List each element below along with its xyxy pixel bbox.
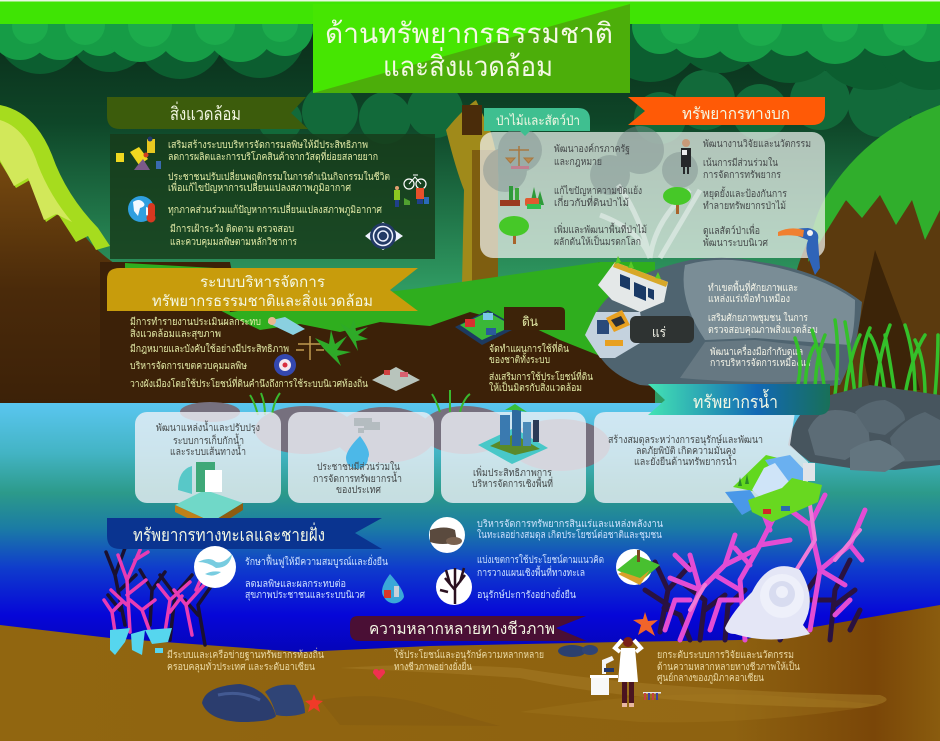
icon: red starfish <box>305 694 323 712</box>
background: sand <box>0 605 940 741</box>
icon: rocks <box>202 645 598 722</box>
text: research hub: ศูนย์กลางของภูมิภาคอาเซียน <box>657 672 764 684</box>
text: local resource network: ครอบคลุมทั่วประเทศ และระดับอาเซียน <box>167 659 315 673</box>
text: land conflict <box>554 185 642 209</box>
card: water sources: พัฒนาแหล่งน้ำและปรับปรุง <box>156 420 260 434</box>
text: coral conservation: อนุรักษ์ปะการังอย่างยั่งยืน <box>477 587 576 601</box>
text: participation: การจัดการทรัพยากร <box>703 170 782 181</box>
text: forest area: เพิ่มและพัฒนาพื้นที่ป่าไม้ <box>554 222 647 236</box>
icon: patient in bed <box>268 317 305 335</box>
icon: isometric land <box>455 310 518 345</box>
text: stop deforestation: หยุดยั้งและป้องกันการ <box>703 186 788 200</box>
icon: test tubes <box>643 692 661 700</box>
text: impact assessment <box>130 316 261 340</box>
text: sustainable use: ทางชีวภาพอย่างยั่งยืน <box>394 659 472 673</box>
text: friendly land use: ส่งเสริมการใช้ประโยชน์ที่ดิน <box>489 369 593 383</box>
text: friendly land use: ให้เป็นมิตรกับสิ่งแวดล้อม <box>489 380 582 394</box>
text: research: พัฒนางานวิจัยและนวัตกรรม <box>703 139 811 150</box>
text: monitoring: มีการเฝ้าระวัง ติดตาม ตรวจสอบ <box>170 223 294 235</box>
icon: seabed minerals <box>429 517 465 553</box>
heading: marine <box>107 518 382 549</box>
text: marine right: บริหารจัดการทรัพยากรสินแร่และแหล่งพลังงาน <box>477 519 663 530</box>
icon: scale <box>296 336 324 360</box>
icon: eye <box>365 222 403 250</box>
icon: world map <box>110 628 172 655</box>
text: research hub: ยกระดับระบบการวิจัยและนวัตกรรม <box>657 650 794 661</box>
text: pollution <box>168 139 378 163</box>
text: zoning <box>477 553 604 579</box>
icon: forest conflict <box>500 186 544 209</box>
title text: และสิ่งแวดล้อม <box>383 47 553 82</box>
text: stop deforestation: ทำลายทรัพยากรป่าไม้ <box>703 200 786 212</box>
text: sustainable use: ใช้ประโยชน์และอนุรักษ์ความหลากหลาย <box>394 648 544 661</box>
background: mineral rock <box>590 258 862 390</box>
text: local resource network <box>167 647 324 673</box>
icon: globe thermometer <box>128 196 156 222</box>
title text <box>325 18 613 82</box>
section: management text <box>130 316 420 391</box>
text: impact assessment: มีการทำรายงานประเมินผลกระทบ <box>130 316 261 328</box>
text: pollution zones: บริหารจัดการเขตควบคุมมลพิษ <box>130 361 247 372</box>
text: land conflict: แก้ไขปัญหาความขัดแย้ง <box>554 185 642 197</box>
heading: management <box>107 268 418 311</box>
text: monitoring <box>170 223 298 248</box>
heading: minerals: แร่ <box>652 324 666 340</box>
heading: environment <box>107 97 308 129</box>
text: reduce pollution: สุขภาพประชาชนและระบบนิเวศ <box>245 590 366 601</box>
heading: water resources: ทรัพยากรน้ำ <box>693 389 778 412</box>
text: wildlife: พัฒนาระบบนิเวศ <box>703 238 769 249</box>
icon: dam <box>725 455 822 522</box>
text: land conflict: เกี่ยวกับที่ดินป่าไม้ <box>554 195 629 209</box>
card: area management: บริหารจัดการเชิงพื้นที่ <box>472 476 553 490</box>
background: rocks right <box>788 385 940 472</box>
text: friendly land use <box>489 369 593 394</box>
text: research hub: ด้านความหลากหลายทางชีวภาพให้เป็น <box>657 659 800 673</box>
heading: land resources: ทรัพยากรทางบก <box>682 106 790 123</box>
text: mining regulation <box>710 344 812 369</box>
text: mining regulation: พัฒนาเครื่องมือกำกับดูแล <box>710 344 803 358</box>
title text: ด้านทรัพยากรธรรมชาติ <box>325 18 613 49</box>
text: forest area: ผลักดันให้เป็นมรดกโลก <box>554 234 641 248</box>
heading tab: forest and wildlife <box>484 108 590 136</box>
text: behaviour: เพื่อแก้ไขปัญหาการเปลี่ยนแปลงสภาพภูมิอากาศ <box>168 180 352 194</box>
coral: right <box>645 495 865 640</box>
background: canopy <box>0 0 940 90</box>
text: community capacity: เสริมศักยภาพชุมชน ในการ <box>708 312 809 324</box>
text: land use plan: ของชาติทั้งระบบ <box>489 352 550 366</box>
card: water sources <box>135 412 281 530</box>
background: underwater rocks and plants <box>180 390 610 471</box>
card: area management: เพิ่มประสิทธิภาพการ <box>473 465 553 479</box>
text: mining zones <box>708 280 798 305</box>
heading: biodiversity: ความหลากหลายทางชีวภาพ <box>369 620 555 638</box>
text: pollution: เสริมสร้างระบบบริหารจัดการมลพิษให้มีประสิทธิภาพ <box>168 139 368 151</box>
text: forest area <box>554 222 647 248</box>
text: behaviour: ประชาชนปรับเปลี่ยนพฤติกรรมในการดำเนินกิจกรรมในชีวิต <box>168 169 390 183</box>
background: grass right <box>795 320 938 395</box>
panel: land resources <box>480 126 825 258</box>
card: public participation <box>288 412 434 503</box>
text: marine left <box>194 546 404 603</box>
card: water balance: และยั่งยืนด้านทรัพยากรน้ำ <box>634 454 737 468</box>
card: water sources: และระบบเส้นทางน้ำ <box>170 444 246 458</box>
heading: land resources <box>628 97 825 125</box>
text: city planning: วางผังเมืองโดยใช้ประโยชน์ที่ดินคำนึงถึงการใช้ระบบนิเวศท้องถิ่น <box>130 376 368 390</box>
icon: island <box>616 549 660 585</box>
icon: waste recycling <box>116 136 161 170</box>
icon: palm plants <box>315 319 368 366</box>
text: land use plan <box>489 341 569 366</box>
panel: water cards <box>135 404 808 530</box>
icon: tree small <box>663 187 691 214</box>
background: forest <box>0 0 940 410</box>
text: marine right: ในทะเลอย่างสมดุล เกิดประโยชน์ต่อชาติและชุมชน <box>477 528 662 541</box>
text: public organisations: และกฎหมาย <box>554 157 602 168</box>
icon: dead coral <box>436 568 472 605</box>
text: wildlife: ดูแลสัตว์ป่าเพื่อ <box>703 223 760 237</box>
text: mining zones: ทำเขตพื้นที่ศักยภาพและ <box>708 280 798 294</box>
text: participation: เน้นการมีส่วนร่วมใน <box>703 157 778 169</box>
text: reduce pollution: ลดมลพิษและผลกระทบต่อ <box>245 579 346 590</box>
icon: flood building <box>175 462 243 530</box>
text: law: มีกฎหมายและบังคับใช้อย่างมีประสิทธิภาพ <box>130 343 289 355</box>
heading: water resources <box>648 384 830 415</box>
icon: wind circle <box>194 546 236 588</box>
heading: biodiversity <box>350 616 587 641</box>
text: community capacity: ตรวจสอบคุณภาพสิ่งแวดล้อม <box>708 322 818 336</box>
background: right hill <box>790 105 940 405</box>
icon: cyclist and gardener <box>394 175 429 207</box>
icon: tree <box>499 216 529 244</box>
text: participation <box>703 157 782 181</box>
text: climate: ทุกภาคส่วนร่วมแก้ปัญหาการเปลี่ยนแปลงสภาพภูมิอากาศ <box>168 202 383 216</box>
text: zoning: การวางแผนเชิงพื้นที่ทางทะเล <box>477 565 585 579</box>
heading: management: ทรัพยากรธรรมชาติและสิ่งแวดล้อม <box>152 290 373 310</box>
icon: toucan <box>778 228 820 275</box>
text: community capacity <box>708 312 818 336</box>
card: public participation: ประชาชนมีส่วนร่วมใน <box>317 461 400 473</box>
background: tree trunk <box>446 100 498 285</box>
text: zoning: แบ่งเขตการใช้ประโยชน์ตามแนวคิด <box>477 553 604 566</box>
text: local resource network: มีระบบและเครือข่ายฐานทรัพยากรท้องถิ่น <box>167 647 324 661</box>
text: public organisations: พัฒนาองค์กรภาครัฐ <box>554 143 630 155</box>
text: marine left: รักษาฟื้นฟูให้มีความสมบูรณ์และยั่งยืน <box>245 554 388 568</box>
text: mining zones: แหล่งแร่เพื่อทำเหมือง <box>708 291 790 305</box>
title banner <box>313 4 630 93</box>
icon: microscope <box>590 656 618 695</box>
heading tab: forest and wildlife: ป่าไม้และสัตว์ป่า <box>496 113 580 128</box>
card: water sources: ระบบการเก็บกักน้ำ <box>173 433 244 447</box>
heading: soil: ดิน <box>522 314 538 329</box>
icon: tap and drop <box>346 418 380 469</box>
text: behaviour <box>168 169 390 194</box>
heading: marine: ทรัพยากรทางทะเลและชายฝั่ง <box>133 522 325 545</box>
icon: pollution zone badge <box>274 354 296 376</box>
text: research hub <box>657 650 800 684</box>
icon: researcher <box>681 139 691 174</box>
background: left hill <box>0 105 130 405</box>
text: marine right <box>429 517 663 605</box>
text: sustainable use <box>394 648 544 673</box>
icon: orange starfish <box>633 612 658 636</box>
icon: polluted drop <box>382 574 404 603</box>
card: water balance: ลดภัยพิบัติ เกิดความมั่นคง <box>636 443 736 457</box>
text: wildlife <box>703 223 769 249</box>
icon: heart <box>373 669 385 680</box>
background: water <box>0 403 940 653</box>
section: soil <box>455 307 593 394</box>
icon: shell <box>725 566 810 640</box>
heading: management: ระบบบริหารจัดการ <box>200 274 325 291</box>
text: pollution: ลดการผลิตและการบริโภคสินค้าจากวัสดุที่ย่อยสลายยาก <box>168 149 378 163</box>
card: water balance: สร้างสมดุลระหว่างการอนุรักษ์และพัฒนา <box>608 434 763 446</box>
text: monitoring: และควบคุมมลพิษตามหลักวิชาการ <box>170 237 298 248</box>
panel: environment <box>110 134 435 259</box>
heading: environment: สิ่งแวดล้อม <box>170 101 241 124</box>
card: area management <box>441 404 586 503</box>
text: stop deforestation <box>703 186 788 212</box>
text: land use plan: จัดทำแผนการใช้ที่ดิน <box>489 341 569 355</box>
icon: smart city <box>478 404 548 464</box>
card: water balance <box>594 412 808 503</box>
icon: mine <box>585 256 668 358</box>
section: minerals <box>585 256 818 369</box>
text: reduce pollution <box>245 579 366 601</box>
background: grass and soil <box>100 262 655 407</box>
text: mining regulation: การบริหารจัดการเหมืองแร่ <box>710 357 812 369</box>
heading: minerals <box>630 316 694 343</box>
icon: scales <box>506 146 533 169</box>
text: public organisations <box>554 143 630 168</box>
text: impact assessment: สิ่งแวดล้อมและสุขภาพ <box>130 326 221 340</box>
icon: isometric city <box>372 367 420 391</box>
card: public participation: การจัดการทรัพยากรน้ำ <box>313 471 402 485</box>
coral: left <box>104 548 212 645</box>
card: public participation: ของประเทศ <box>336 485 382 496</box>
icon: scientist <box>615 637 641 707</box>
